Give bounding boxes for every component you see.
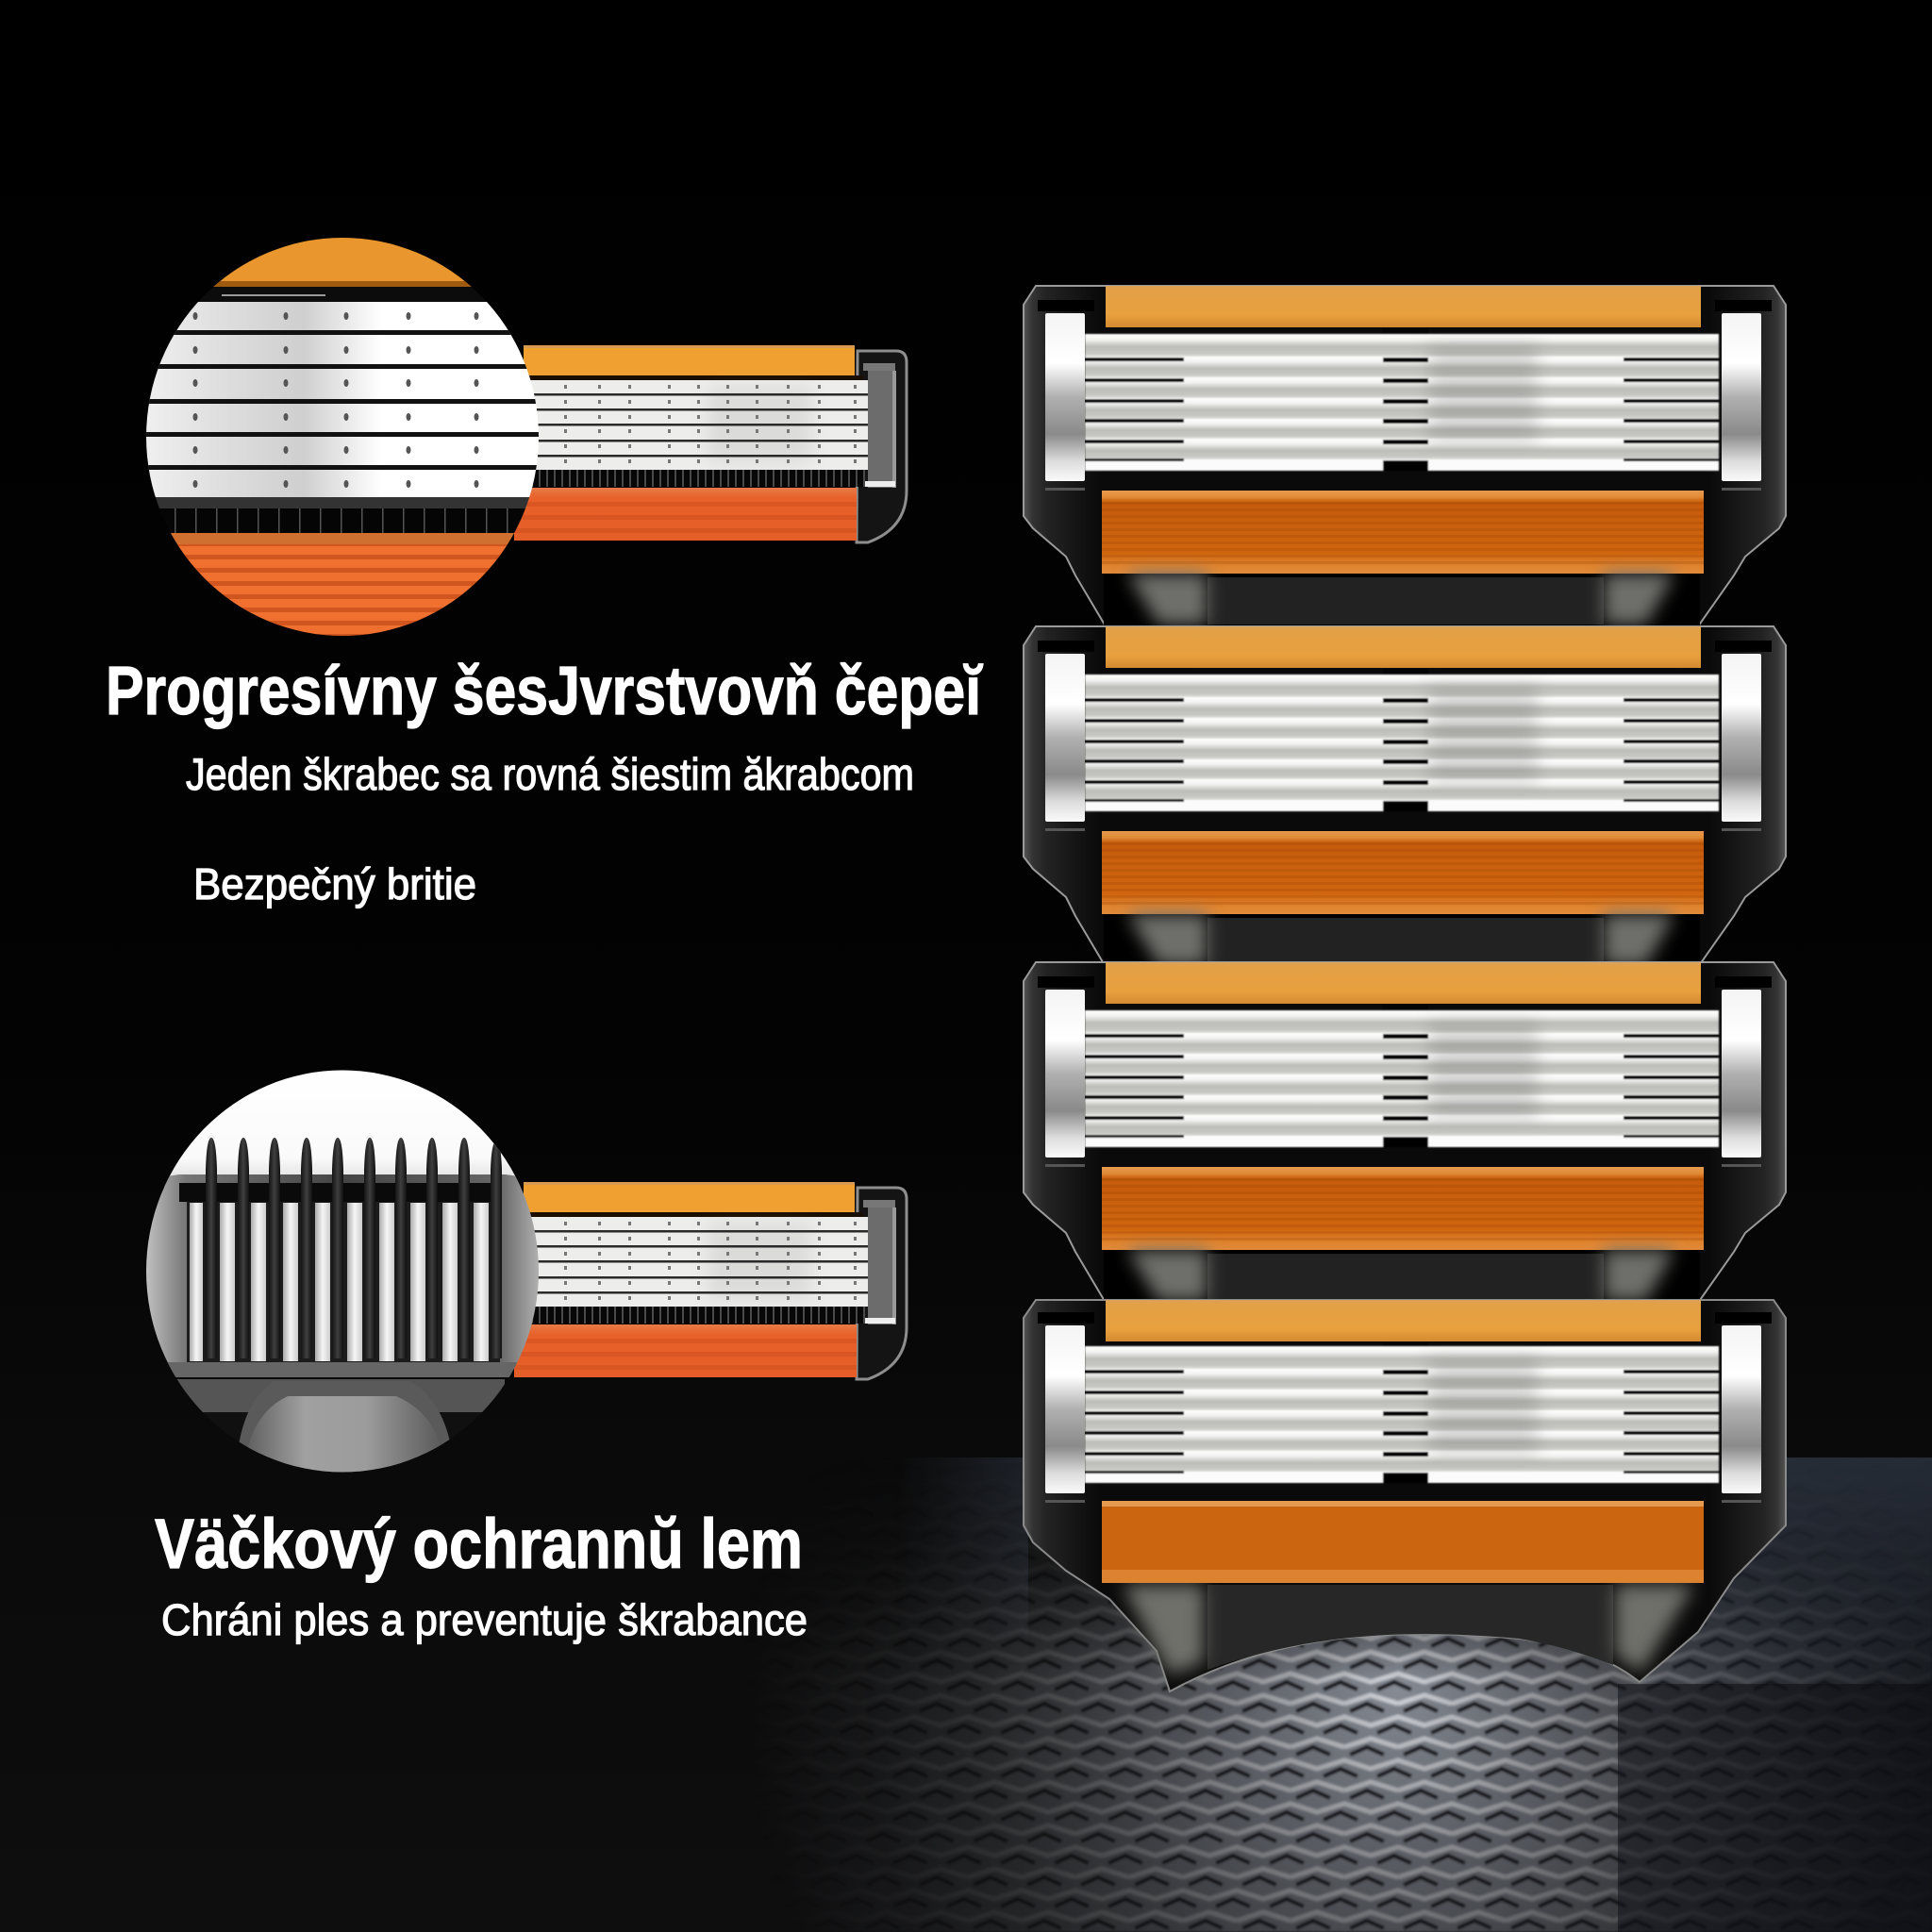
cartridge 2 lower lubricating strip	[1102, 831, 1704, 914]
cartridge 4 lower lubricating strip	[1102, 1501, 1704, 1583]
cartridge 3 side clips	[1038, 976, 1772, 1167]
comb white bars	[190, 1203, 489, 1361]
cartridge 2 side clips	[1038, 641, 1772, 831]
magnifier circle: blades close-up	[146, 234, 539, 637]
razor cartridge 1	[1024, 286, 1786, 626]
subheading: protects skin: Chráni ples a preventuje škrabance	[161, 1595, 808, 1644]
razor cartridge 4	[1024, 1300, 1786, 1691]
pixelated lower-right patch	[1618, 1684, 1932, 1932]
cartridge 3 lower lubricating strip	[1102, 1167, 1704, 1250]
razor cartridge 3	[1024, 962, 1786, 1303]
cartridge 3 pivot underside	[1104, 1250, 1700, 1302]
cartridge 2 shell	[1024, 626, 1786, 967]
horizon band right of cartridges	[1641, 1457, 1932, 1684]
subheading: one razor equals six: Jeden škrabec sa rovná šiestim ăkrabcom	[186, 749, 914, 799]
cartridge 3 shell	[1024, 962, 1786, 1303]
side view of cartridge, bottom	[514, 1182, 907, 1379]
cartridge 4 underside	[1123, 1585, 1694, 1674]
label: safe shaving: Bezpečný britie	[193, 859, 476, 908]
heading: cam guard: Väčkový ochrannŭ lem	[155, 1505, 803, 1583]
cartridge 3 top guard strip	[1106, 962, 1701, 1016]
cartridge 1 six blades	[1085, 334, 1719, 471]
side view of cartridge, top	[514, 345, 907, 542]
comb dark teeth	[206, 1138, 502, 1358]
magnifier circle: guard comb close-up	[146, 1070, 539, 1478]
cartridge 1 pivot underside	[1104, 574, 1700, 625]
cartridge 4 top guard strip	[1106, 1300, 1701, 1354]
cartridge 4 shell with lower tips	[1024, 1300, 1786, 1691]
cartridge 4 six blades	[1085, 1346, 1719, 1483]
cartridge 3 six blades	[1085, 1010, 1719, 1147]
cartridge 1 top guard strip	[1106, 286, 1701, 340]
cartridge 2 pivot underside	[1104, 914, 1700, 966]
textured skin surface	[808, 1524, 1932, 1932]
horizon band left of cartridges	[932, 1457, 1028, 1615]
cartridge 1 side clips	[1038, 300, 1772, 491]
cartridge 1 lower lubricating strip	[1102, 491, 1704, 574]
cartridge 1 shell	[1024, 286, 1786, 626]
cartridge 2 top guard strip	[1106, 626, 1701, 680]
cartridge 4 side clips	[1038, 1312, 1772, 1503]
cartridge 2 six blades	[1085, 675, 1719, 811]
razor cartridge 2	[1024, 626, 1786, 967]
heading: progressive blade: Progresívny šesJvrstvovň čepeĭ	[106, 654, 984, 729]
